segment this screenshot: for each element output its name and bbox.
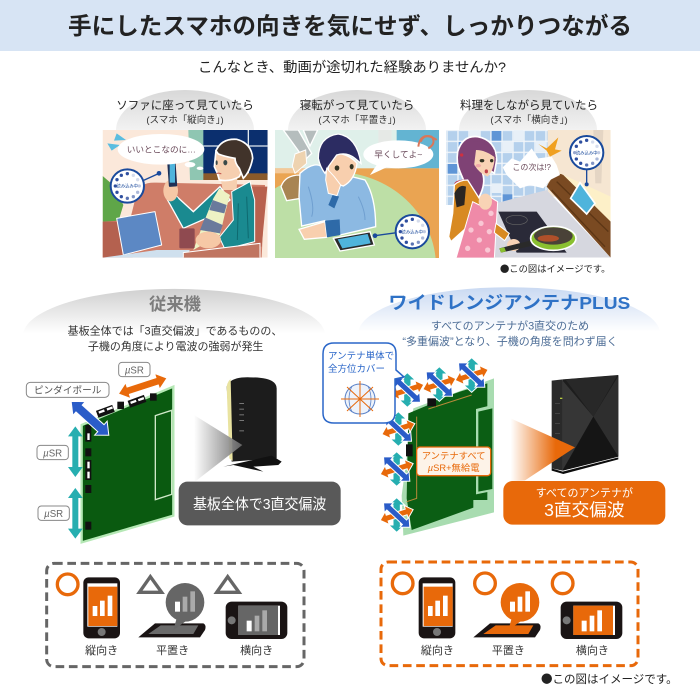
scene captions with domes: (スマホ「縦向き」) [146, 114, 224, 126]
rating circle [475, 573, 495, 594]
label: portrait: 縦向き [421, 643, 454, 657]
circuit board [82, 387, 173, 542]
illustration: sofa scene [103, 130, 268, 258]
rating circle [392, 573, 413, 594]
label: landscape: 横向き [240, 643, 273, 657]
router: wide range [552, 375, 618, 474]
icon: landscape phone [561, 602, 622, 639]
panel: conventional model [23, 289, 341, 542]
image note top: ●この図はイメージです。 [500, 261, 610, 275]
icon: flat phone [473, 583, 541, 637]
illustration: kitchen scene: 読み込み中 [576, 149, 597, 156]
callout: omnidirectional antenna: アンテナ単体で [328, 350, 394, 362]
scene captions with domes [116, 90, 598, 130]
arrow: teal lower [68, 488, 83, 539]
callout: all antennas: 3直交偏波 [544, 500, 625, 520]
callout: omnidirectional antenna: 全方位カバー [328, 363, 385, 375]
title banner [0, 0, 700, 51]
router: conventional [223, 377, 282, 472]
label: pin dipole [26, 382, 109, 397]
dome heading: wide range [358, 287, 660, 348]
antenna arrow cluster 4 [380, 412, 417, 446]
panel: wide range antenna plus [358, 287, 665, 536]
subtitle question: こんなとき、動画が途切れた経験ありませんか? [198, 59, 506, 75]
label: all antennas: µSR+無給電 [428, 462, 480, 473]
illustration: lying on rug scene: 早くしてよ~ [374, 150, 422, 160]
dome heading: conventional: 従来機 [149, 294, 202, 314]
antenna arrow cluster 1 [389, 373, 426, 407]
dome heading: wide range: すべてのアンテナが3直交のため [431, 318, 589, 332]
title banner: 手にしたスマホの向きを気にせず、しっかりつながる [68, 12, 632, 39]
dome heading: wide range: ワイドレンジアンテナPLUS [388, 293, 630, 313]
rating triangle [139, 577, 162, 592]
scene captions with domes: (スマホ「横向き」) [490, 114, 568, 126]
icon: landscape phone [226, 602, 287, 639]
pointer triangle orange [511, 418, 575, 482]
callout: omnidirectional antenna [323, 343, 404, 423]
label: all antennas: アンテナすべて [422, 451, 486, 461]
label: portrait: 縦向き [85, 643, 118, 657]
panel: conventional signal strength [47, 563, 304, 667]
label: flat: 平置き [156, 644, 189, 657]
illustration: kitchen scene [446, 130, 611, 258]
circuit board [402, 378, 494, 536]
scene captions with domes: 寝転がって見ていたら [300, 98, 414, 112]
illustration: kitchen scene: この次は!? [512, 162, 552, 172]
label: all antennas [417, 447, 491, 476]
label: uSR lower: µSR [44, 509, 63, 520]
arrow: orange horizontal polarisation [116, 371, 169, 401]
callout: whole board: 基板全体で3直交偏波 [193, 496, 327, 513]
callout: all antennas: すべてのアンテナが [536, 486, 633, 500]
icon: portrait phone [83, 577, 120, 638]
illustration: lying on rug scene [275, 130, 439, 258]
label: landscape: 横向き [576, 643, 609, 657]
rating triangle [217, 577, 239, 592]
rating circle [552, 573, 573, 594]
label: flat: 平置き [492, 644, 525, 657]
label: uSR middle [37, 445, 68, 460]
arrow: teal upper [68, 426, 83, 477]
label: uSR lower [38, 506, 69, 520]
scene captions with domes: (スマホ「平置き」) [318, 115, 396, 126]
antenna arrow cluster 5 [378, 452, 415, 486]
arrow: blue dipole [65, 394, 115, 442]
label: uSR middle: µSR [43, 448, 62, 459]
icon: portrait phone [419, 577, 455, 638]
label: uSR top: µSR [125, 365, 144, 376]
rating circle [57, 574, 78, 595]
dome heading: conventional [23, 289, 325, 353]
icon: flat phone [138, 583, 206, 637]
illustration: sofa scene: いいとこなのに… [127, 144, 196, 154]
antenna arrow cluster 6 [378, 498, 415, 532]
antenna arrow cluster 3 [453, 358, 490, 392]
label: uSR top [119, 362, 150, 377]
illustration: lying on rug scene: 読み込み中 [402, 228, 423, 235]
pointer triangle gray [194, 415, 242, 482]
dome heading: conventional: 子機の角度により電波の強弱が発生 [88, 339, 263, 353]
antenna arrow cluster 2 [421, 367, 458, 401]
dome heading: wide range: “多重偏波”となり、子機の角度を問わず届く [402, 334, 618, 348]
panel: wide range signal strength [381, 562, 638, 666]
callout: all antennas [503, 481, 665, 525]
label: pin dipole: ピンダイポール [34, 384, 102, 396]
dome heading: conventional: 基板全体では「3直交偏波」であるものの、 [68, 323, 282, 337]
scene captions with domes: 料理をしながら見ていたら [460, 98, 598, 112]
illustration: sofa scene: 読み込み中 [117, 183, 138, 190]
scene captions with domes: ソファに座って見ていたら [116, 99, 254, 112]
image note bottom: ●この図はイメージです。 [541, 671, 678, 687]
callout: whole board [179, 482, 341, 525]
